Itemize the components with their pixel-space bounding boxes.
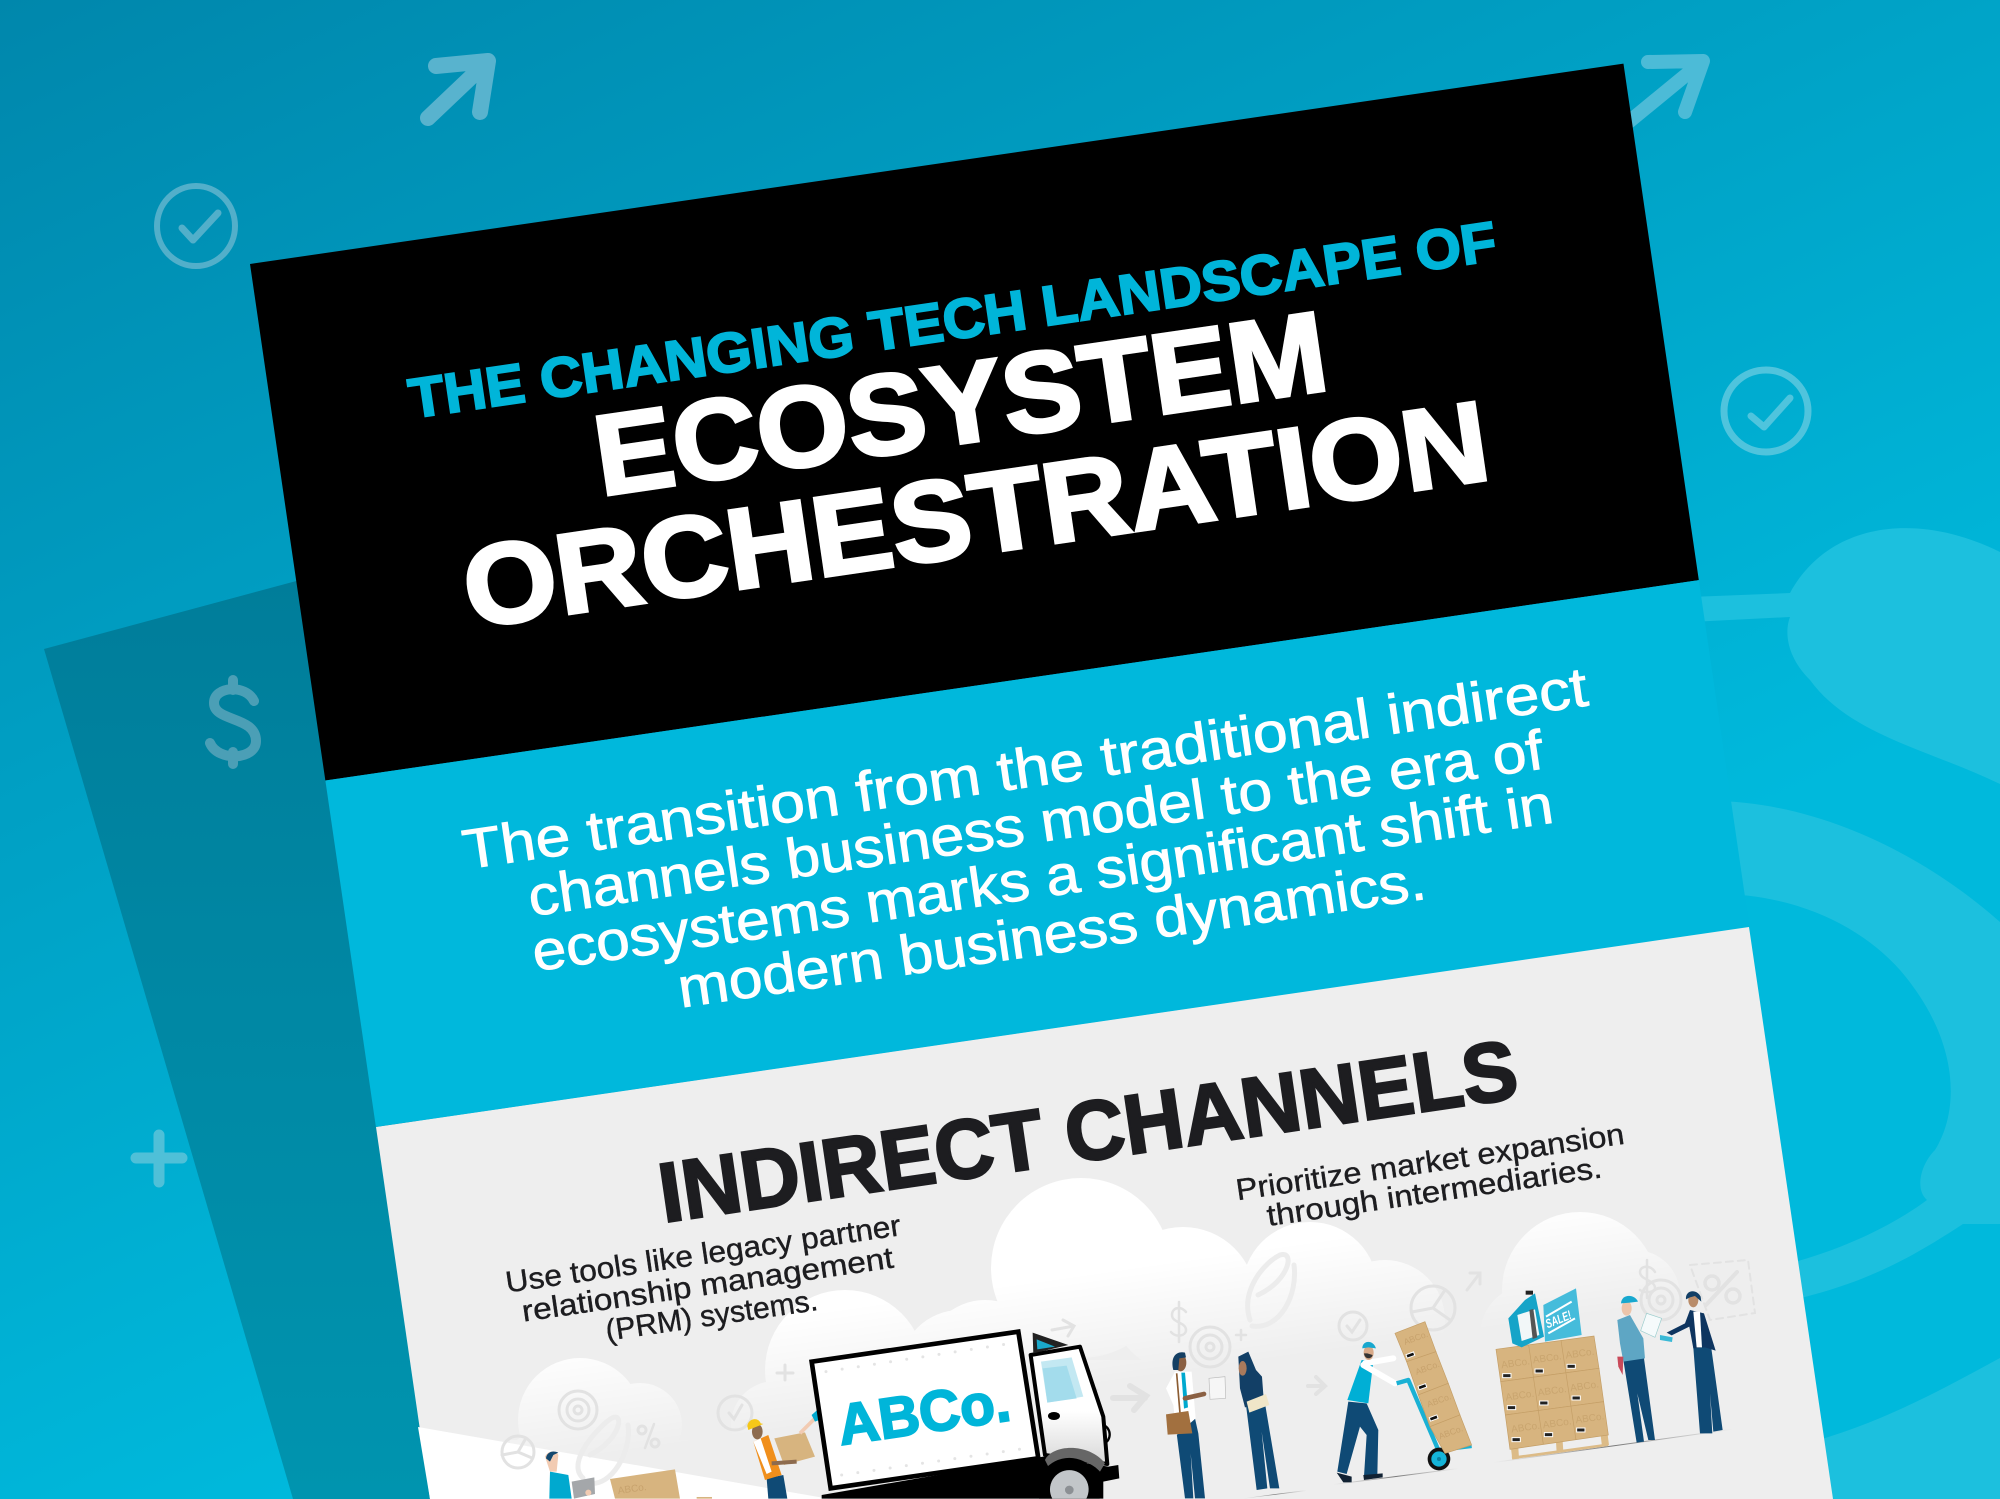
icon: check circle right — [1724, 370, 1808, 452]
section heading: INDIRECT CHANNELS — [653, 1022, 1523, 1240]
door handle — [1048, 1412, 1060, 1420]
ABCo logo: ABCo. — [834, 1370, 1014, 1458]
pallet box lettering: ABCo. — [1501, 1356, 1531, 1371]
caption: left: Use tools like legacy partner — [503, 1209, 903, 1300]
icon: dollar sign — [210, 680, 256, 764]
pallet box lettering: ABCo. — [1511, 1421, 1541, 1436]
front wheel — [1038, 1458, 1101, 1499]
pallet boxes — [1496, 1336, 1608, 1449]
title eyebrow: THE CHANGING TECH LANDSCAPE OF — [405, 209, 1500, 430]
pallet box lettering: ABCo. — [1505, 1389, 1535, 1404]
panel: title band — [250, 64, 1699, 781]
cargo box rivets — [826, 1344, 1022, 1475]
pallet box lettering: ABCo. — [1542, 1416, 1572, 1431]
truck cab — [1031, 1347, 1107, 1464]
caption: right: through intermediaries. — [1265, 1152, 1604, 1233]
illustration: person with laptop: ABCo. — [617, 1482, 647, 1497]
pallet box labels — [1503, 1364, 1585, 1442]
icon: check circle left — [157, 186, 235, 266]
back poster panel — [44, 580, 500, 1499]
cart worker — [1337, 1342, 1395, 1482]
caption: right: Prioritize market expansion — [1234, 1118, 1626, 1207]
intro text: The transition from the traditional indirect — [458, 655, 1592, 881]
side mirror — [1103, 1425, 1110, 1443]
panel: poster header — [250, 64, 1772, 1279]
stacked box lettering: ABCo. — [1414, 1359, 1441, 1377]
truck cargo box — [812, 1332, 1038, 1488]
intro text: channels business model to the era of — [524, 718, 1548, 928]
title line one: ECOSYSTEM — [586, 288, 1335, 520]
stacked boxes — [1395, 1322, 1472, 1453]
stacked box lettering — [1402, 1329, 1464, 1441]
sale sign — [1543, 1288, 1582, 1342]
oil jugs — [1508, 1291, 1544, 1347]
pallet legs — [1511, 1435, 1609, 1459]
illustration background: white ground wedge — [418, 1427, 830, 1499]
sale sign: SALE! — [1544, 1308, 1574, 1331]
caption: left — [503, 1209, 912, 1361]
illustration: two people talking and cart worker — [1166, 1322, 1472, 1499]
truck chassis — [822, 1457, 1119, 1499]
ground shadows — [1243, 1468, 1458, 1499]
hand truck — [1397, 1380, 1472, 1470]
illustration: delivery truck — [812, 1332, 1119, 1499]
man in shirt — [1617, 1296, 1662, 1443]
title line two: ORCHESTRATION — [455, 378, 1497, 653]
fender — [1045, 1448, 1105, 1472]
ground shadow — [1493, 1429, 1733, 1463]
stacked box lettering: ABCo. — [1402, 1329, 1429, 1347]
large dollar decoration — [1690, 528, 2000, 1499]
stacked box lettering: ABCo. — [1426, 1391, 1453, 1409]
box labels — [1406, 1352, 1438, 1421]
caption: left: relationship management — [520, 1242, 896, 1329]
intro text: ecosystems marks a significant shift in — [528, 772, 1557, 983]
pallet box lettering: ABCo. — [1565, 1347, 1595, 1362]
woman with folder — [1238, 1352, 1279, 1490]
man with satchel — [1166, 1352, 1226, 1498]
panel: indirect channels section — [376, 927, 1833, 1499]
panel: intro band — [325, 580, 1749, 1127]
icon: arrow top left — [428, 61, 488, 118]
illustration: pallet and retail exchange — [1493, 1288, 1733, 1463]
stacked box lettering: ABCo. — [1437, 1423, 1464, 1441]
intro text: modern business dynamics. — [673, 848, 1430, 1019]
woman in blazer — [1660, 1291, 1723, 1433]
pallet box lettering: ABCo. — [1537, 1384, 1567, 1399]
wind deflector — [1033, 1333, 1068, 1353]
cab window — [1041, 1357, 1083, 1403]
pallet box lettering: ABCo. — [1570, 1379, 1600, 1394]
caption: right — [1234, 1118, 1631, 1237]
icon: arrow top right — [1625, 61, 1703, 125]
caption: left: (PRM) systems. — [603, 1284, 820, 1348]
illustration: person with laptop — [545, 1451, 712, 1499]
illustration: faint background icons — [502, 1254, 1755, 1483]
icon: plus — [136, 1135, 182, 1182]
intro text — [458, 655, 1616, 1047]
pallet box lettering: ABCo. — [1575, 1411, 1605, 1426]
pallet box lettering — [1501, 1347, 1605, 1436]
pallet box lettering: ABCo. — [1532, 1351, 1562, 1366]
illustration: clouds — [519, 1178, 1646, 1411]
illustration: warehouse worker with box — [747, 1410, 819, 1499]
